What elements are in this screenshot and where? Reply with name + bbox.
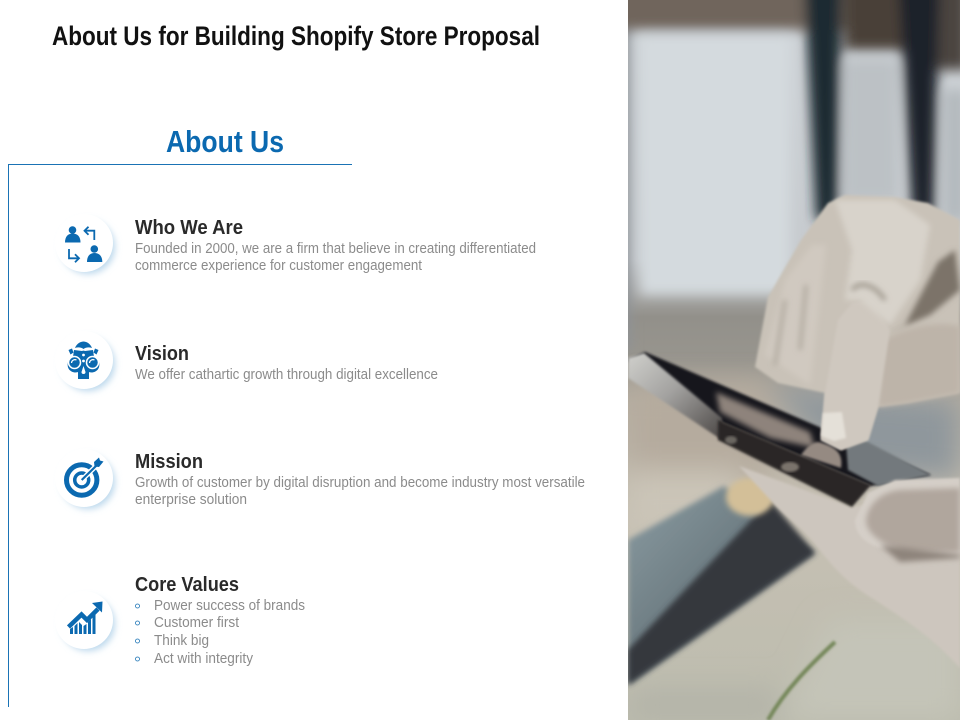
grass [768,642,835,720]
heading: mission: Mission [135,451,203,473]
thumb [855,478,960,553]
blurred background [628,0,960,306]
title: About Us for Building Shopify Store Proposal [52,21,540,51]
hand shading [901,248,960,328]
icon: target with arrow [55,449,115,509]
text: who we are description: Founded in 2000, we are a firm that believe in creating differentiated [135,241,536,257]
heading: About Us: About Us [166,124,284,159]
text: mission description [135,475,585,508]
text: mission description: Growth of customer by digital disruption and become industry most versatile [135,475,585,491]
heading: vision: Vision [135,343,189,365]
panel: who we are [55,214,536,274]
icon: binoculars [55,331,115,391]
phone screen [628,352,931,486]
list: core values: Power success of brands [154,598,305,614]
photo: hand using smartphone [610,0,960,720]
heading: who we are: Who We Are [135,217,243,239]
panel: vision [55,331,438,391]
list: core values: Customer first [154,615,239,631]
list: core values: Think big [154,633,209,649]
icon: growth chart [55,591,115,651]
text: who we are description: commerce experience for customer engagement [135,258,422,274]
list: core values: Act with integrity [154,651,254,667]
text: who we are description [135,241,536,274]
text: mission description: enterprise solution [135,492,247,508]
text: vision description: We offer cathartic growth through digital excellence [135,367,438,383]
icon: people exchange [55,214,115,274]
thumb under phone [801,442,841,468]
phone lower band [718,420,871,507]
list: core values [136,598,305,667]
panel: core values [55,574,305,667]
panel: mission [55,449,585,509]
palm [739,466,960,668]
phone metal edge [628,353,722,440]
heading: core values: Core Values [135,574,239,596]
tablet on table [628,486,815,685]
upper hand [755,195,960,450]
